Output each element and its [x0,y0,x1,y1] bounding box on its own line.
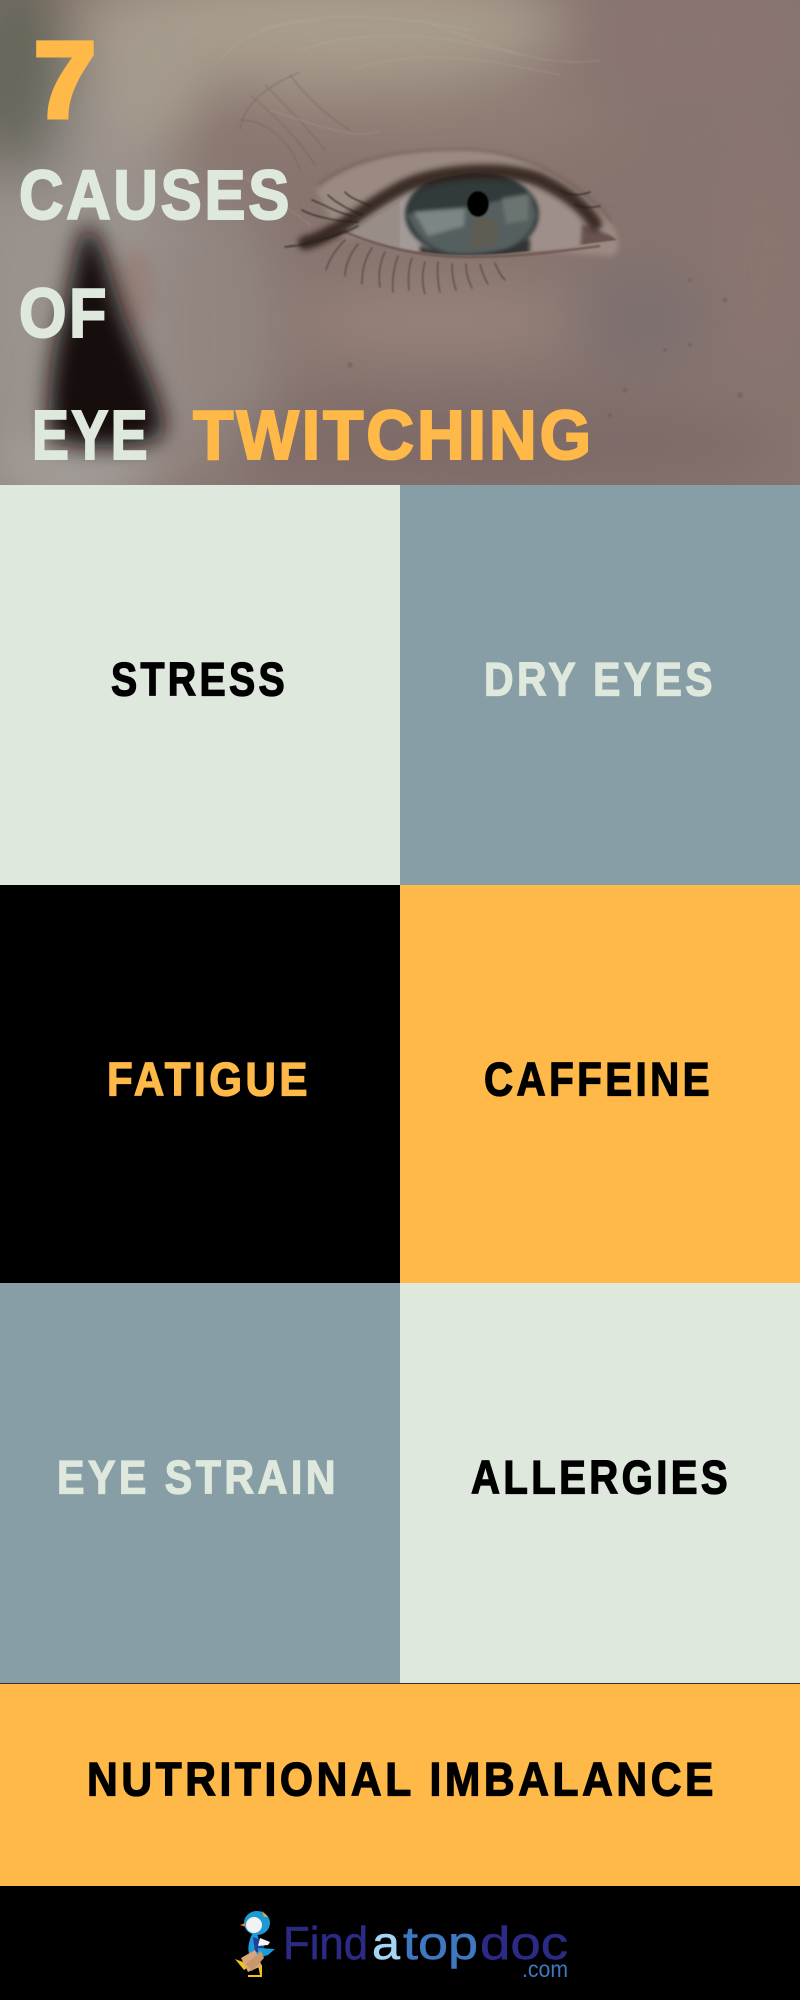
panel: fatigue [0,885,400,1283]
logo wordmark: doc [480,1917,568,1969]
eyeball [345,170,625,262]
eyelashes [285,171,600,294]
title number 7: 7 [34,19,96,140]
title [19,19,594,474]
panel: eye strain: EYE STRAIN [57,1452,339,1504]
icon: duck mascot [235,1911,275,1977]
footer band [0,1886,800,2000]
logo wordmark: top [403,1917,478,1969]
panel: dry eyes [400,485,800,885]
title word OF: OF [19,274,109,352]
panel: dry eyes: DRY EYES [484,654,716,706]
eyebrow hair [240,52,520,224]
logo wordmark: .com [522,1956,568,1982]
skin marks [347,278,743,417]
panel: nutritional imbalance [0,1683,800,1886]
nose shadow [49,225,164,447]
logo wordmark: Find [283,1917,368,1969]
panel: allergies: ALLERGIES [471,1452,731,1504]
title word EYE: EYE [32,396,150,474]
panel: nutritional imbalance: NUTRITIONAL IMBALANCE [87,1754,717,1806]
photo: close-up of an eye [0,0,800,530]
upper eyelid [316,149,619,256]
panel: stress: STRESS [111,654,288,706]
panel: stress [0,485,400,885]
panel: caffeine: CAFFEINE [484,1054,713,1106]
panel: caffeine [400,885,800,1283]
pupil [467,191,489,217]
logo wordmark: a [372,1917,400,1969]
logo wordmark [283,1917,568,1982]
title word TWITCHING: TWITCHING [193,396,594,474]
panel: allergies [400,1283,800,1683]
panel: fatigue: FATIGUE [107,1054,311,1106]
panel: eye strain [0,1283,400,1683]
title word CAUSES: CAUSES [19,156,292,234]
iris [405,170,539,262]
